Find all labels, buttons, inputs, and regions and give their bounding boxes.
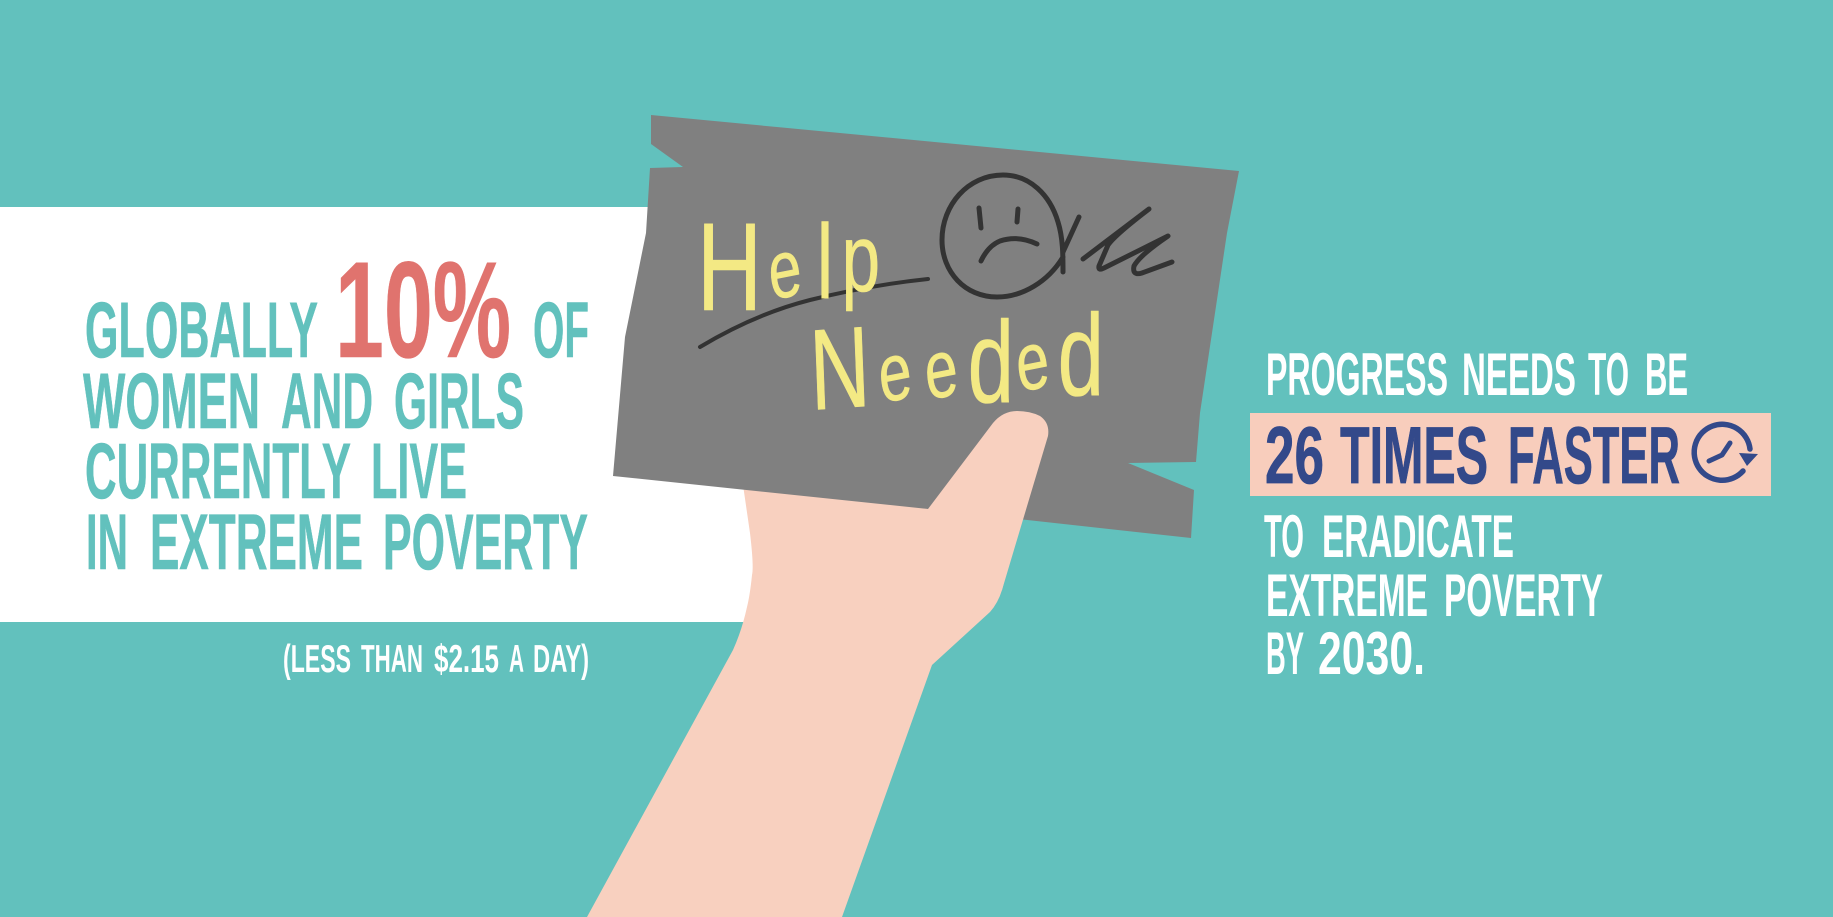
handwritten sign text: Help: H [697,198,762,338]
right text: progress needs to be: BE [1645,341,1688,408]
line: currently live: LIVE [371,426,467,515]
left statistic text [83,234,589,586]
right text: to eradicate extreme poverty by 2030 [1264,503,1603,687]
line: globally 10% of: GLOBALLY [85,285,318,374]
right text: to eradicate extreme poverty by 2030: ERADICATE [1322,503,1514,570]
highlighted figure: 10%: 10% [335,234,511,387]
cardboard sign [613,115,1239,538]
line: in extreme poverty: IN [86,497,128,586]
footnote: less than $2.15 a day: $2.15 [434,638,499,681]
right text: to eradicate extreme poverty by 2030: TO [1264,503,1304,570]
line: women and girls: GIRLS [394,356,524,445]
footnote: less than $2.15 a day [283,638,589,681]
right text: to eradicate extreme poverty by 2030: BY [1266,620,1304,687]
callout: 26 times faster [1250,411,1771,501]
handwritten sign text: Needed: e [874,324,916,421]
callout: 26 times faster: TIMES [1340,411,1488,501]
line: globally 10% of [85,234,589,387]
panel: white band [0,207,770,622]
arm and hand behind sign [587,485,1020,917]
handwritten sign text: Help: l [816,202,833,321]
scribble [1063,209,1172,274]
handwritten sign text: Help: p [842,204,880,312]
handwritten sign text: Needed: e [1011,313,1053,410]
right text: progress needs to be: TO [1588,341,1629,408]
line: in extreme poverty: EXTREME [150,497,363,586]
thumb over sign [780,411,1048,640]
handwritten sign text: Needed: d [968,299,1014,427]
handwritten sign text: Needed: d [1058,292,1104,420]
line: currently live: CURRENTLY [85,426,351,515]
footnote: less than $2.15 a day: (LESS [283,638,351,681]
right text: to eradicate extreme poverty by 2030: EXTREME [1266,562,1428,629]
icon: clock with arrow [1694,424,1758,480]
sign underline and doodles [700,175,1172,347]
footnote: less than $2.15 a day: THAN [361,638,423,681]
right text: progress needs to be: NEEDS [1462,341,1576,408]
handwritten sign text: Help: e [764,221,805,318]
right text: to eradicate extreme poverty by 2030: 2030. [1318,620,1425,687]
icon: sad face [942,175,1063,297]
handwritten sign text: Needed: e [920,321,962,418]
callout: 26 times faster: 26 [1265,411,1324,501]
handwritten sign text: Needed: N [808,303,872,435]
footnote: less than $2.15 a day: A [509,638,524,681]
line: women and girls: AND [281,356,373,445]
footnote: less than $2.15 a day: DAY) [533,638,589,681]
callout: 26 times faster: FASTER [1508,411,1680,501]
right text: to eradicate extreme poverty by 2030: POVERTY [1444,562,1603,629]
line: women and girls: WOMEN [83,356,260,445]
line: globally 10% of: OF [533,285,589,374]
right text: progress needs to be: PROGRESS [1266,341,1448,408]
underline [700,279,928,347]
line: in extreme poverty: POVERTY [383,497,588,586]
